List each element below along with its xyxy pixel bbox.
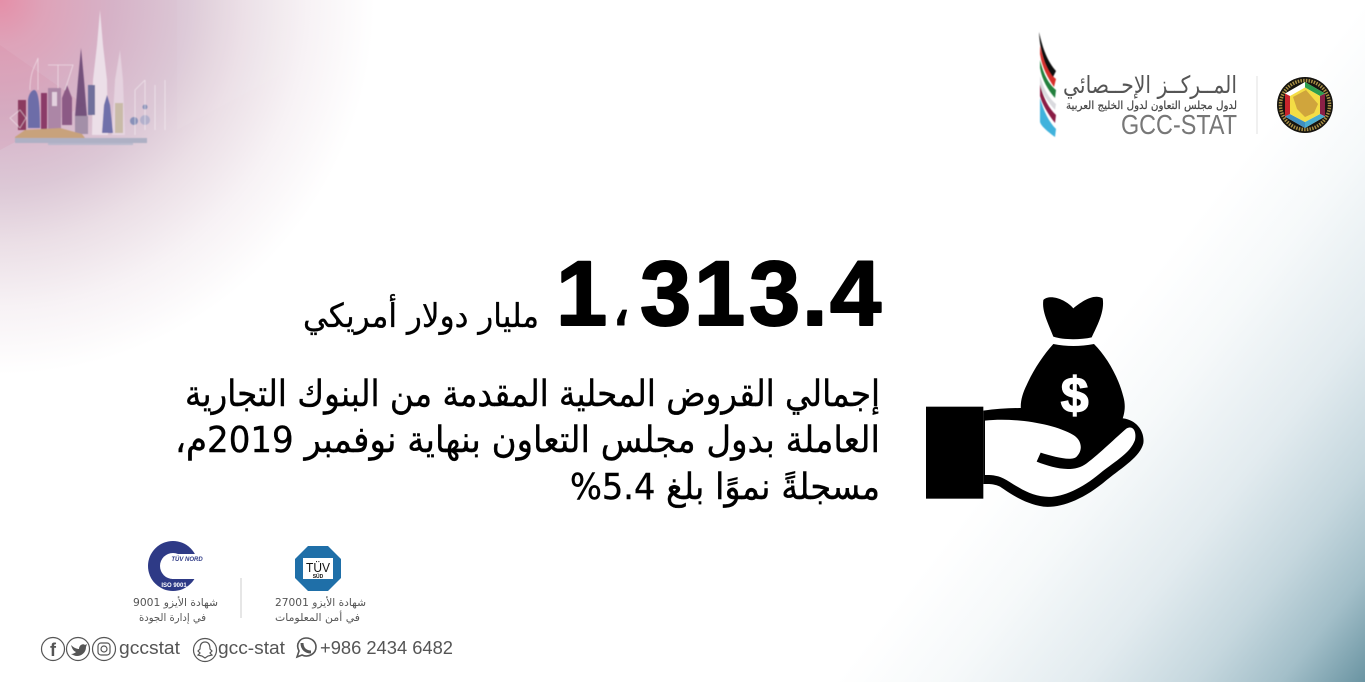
- certificate: TUV SUD ISO 27001: SÜD: [313, 573, 324, 580]
- certificate caption: ISO 27001: في أمن المعلومات: [275, 610, 360, 624]
- certificate: TUV NORD ISO 9001: TÜV NORD: [171, 556, 203, 563]
- logo: Arabic subtitle: لدول مجلس التعاون لدول الخليج العربية: [1066, 99, 1237, 112]
- headline number: 313.4: [640, 243, 881, 345]
- icon: hand holding money bag: $: [1061, 368, 1089, 424]
- logo: colored stripes: [1039, 32, 1056, 137]
- handle: gccstat: gccstat: [119, 638, 180, 658]
- description text: إجمالي القروض المحلية المقدمة من البنوك التجارية: [185, 374, 880, 415]
- icon: whatsapp: [297, 638, 316, 657]
- headline number: 1: [556, 243, 607, 345]
- description text: مسجلةً نموًا بلغ 5.4%: [570, 467, 880, 508]
- handle: gcc-stat: gcc-stat: [218, 638, 285, 658]
- logo: Arabic name: المــركــز الإحــصائي: [1063, 71, 1237, 99]
- certificate caption: ISO 27001: [275, 596, 366, 624]
- description text: العاملة بدول مجلس التعاون بنهاية نوفمبر 2019م،: [175, 420, 880, 461]
- certificate: TUV SUD ISO 27001: [295, 546, 341, 591]
- phone number: +986 2434 6482: [320, 638, 453, 658]
- certificate caption: ISO 9001: في إدارة الجودة: [139, 612, 206, 624]
- icon: snapchat: [194, 638, 216, 662]
- unit: billion US dollars: مليار دولار أمريكي: [303, 294, 539, 335]
- description text: [175, 374, 880, 508]
- headline number: ،: [611, 267, 631, 340]
- social icons: facebook, twitter, instagram: [42, 638, 116, 660]
- certificate: TUV NORD ISO 9001: ISO 9001: [161, 583, 187, 589]
- certificate caption: ISO 9001: [133, 596, 218, 624]
- city skyline illustration: [10, 10, 165, 145]
- certificate caption: ISO 9001: شهادة الأيزو 9001: [133, 596, 218, 609]
- logo: GCC-STAT: GCC-STAT: [1121, 109, 1237, 140]
- certificate caption: ISO 27001: شهادة الأيزو 27001: [275, 596, 366, 609]
- social icons: facebook, twitter, instagram: f: [50, 640, 57, 660]
- icon: hand holding money bag: [926, 297, 1144, 507]
- GCC emblem: [1257, 76, 1333, 134]
- certificate: TUV SUD ISO 27001: TÜV: [306, 560, 330, 575]
- certificate: TUV NORD ISO 9001: [148, 541, 203, 591]
